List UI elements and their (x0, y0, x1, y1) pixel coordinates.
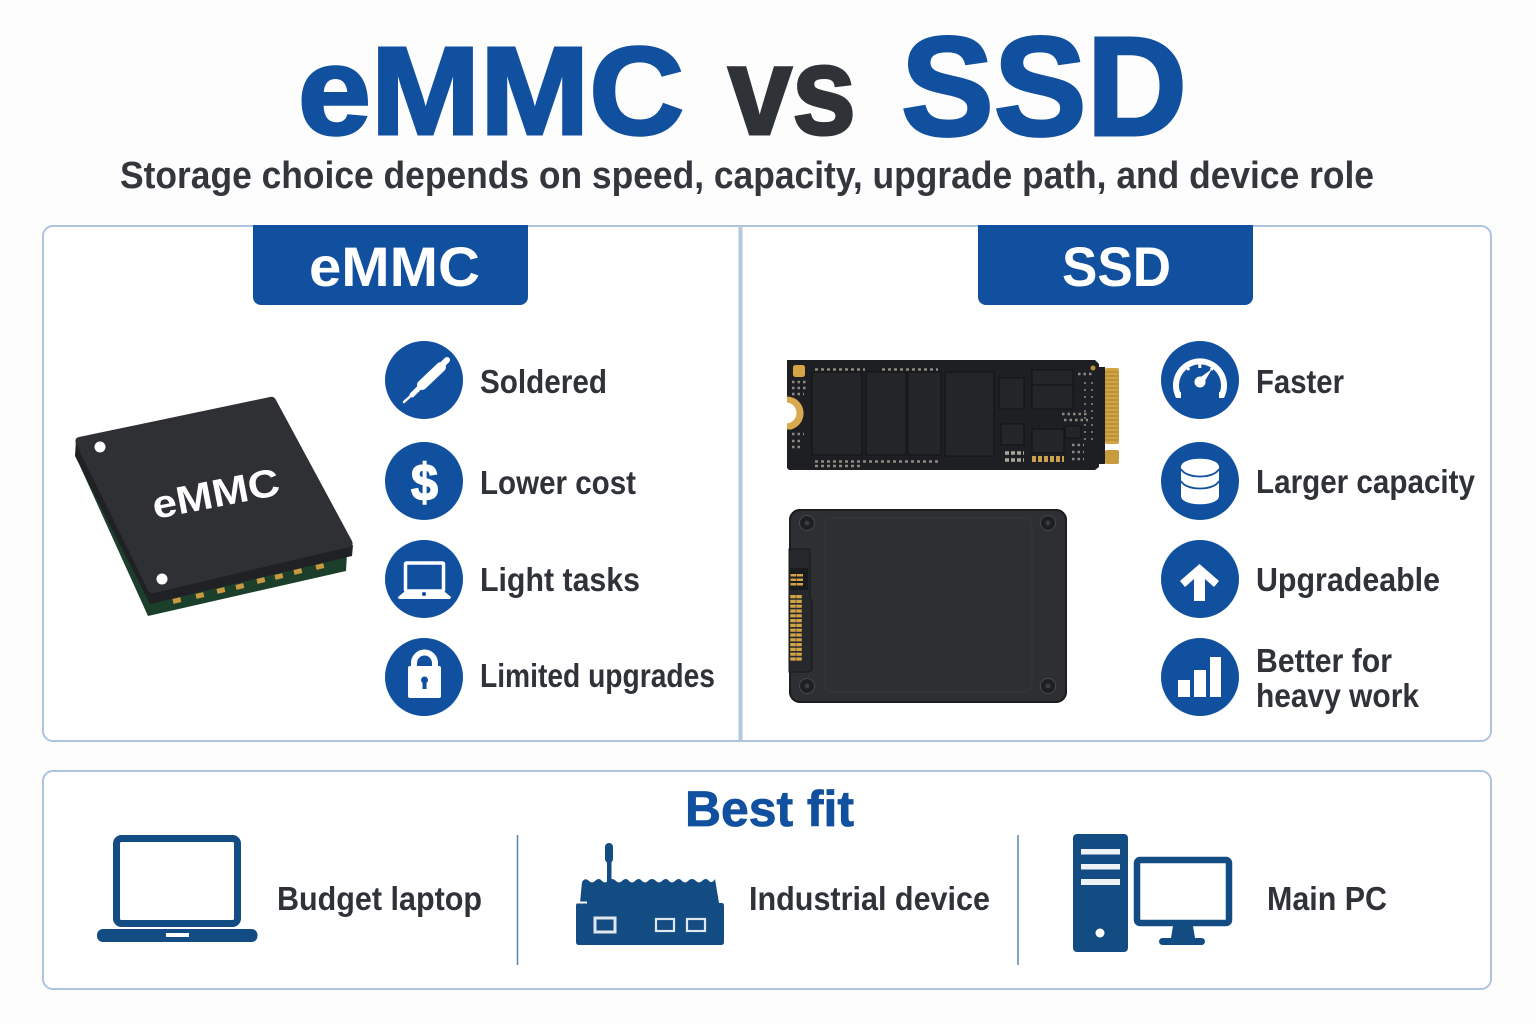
text: Better for heavy work (1256, 642, 1420, 714)
icon: speed gauge (1161, 341, 1239, 419)
icon: bar chart (1161, 638, 1239, 716)
text: Better for heavy work: Better for (1256, 642, 1392, 679)
text: Budget laptop: Budget laptop (277, 880, 482, 917)
icon: database (1161, 442, 1239, 520)
title (298, 7, 1187, 165)
text: Main PC: Main PC (1267, 880, 1387, 917)
icon: dollar: $ (411, 454, 438, 512)
text: Limited upgrades: Limited upgrades (480, 657, 715, 694)
text: Soldered: Soldered (480, 363, 607, 400)
icon: up arrow (1161, 540, 1239, 618)
title: vs (728, 22, 856, 161)
icon: lock (385, 638, 463, 716)
text: Better for heavy work: heavy work (1256, 677, 1420, 714)
text: Light tasks: Light tasks (480, 561, 640, 598)
M.2 SSD illustration (770, 360, 1119, 470)
icon: laptop (385, 540, 463, 618)
text: Larger capacity: Larger capacity (1256, 463, 1476, 500)
panel: best fit (43, 771, 1491, 989)
icon: industrial device (576, 843, 724, 945)
icon: budget laptop (97, 838, 258, 942)
icon: dollar (385, 442, 463, 520)
title: SSD (901, 7, 1187, 165)
text: Upgradeable: Upgradeable (1256, 561, 1440, 598)
subtitle: Storage choice depends on speed, capacity, upgrade path, and device role (120, 155, 1374, 197)
icon: soldering iron (385, 341, 463, 419)
eMMC chip illustration (75, 397, 353, 616)
title: eMMC (298, 22, 684, 161)
eMMC chip illustration: eMMC (149, 461, 283, 528)
heading: Best fit: Best fit (685, 781, 854, 837)
panel: comparison (43, 225, 1491, 741)
2.5 inch SSD illustration (789, 509, 1067, 703)
heading tab: eMMC: eMMC (309, 235, 480, 298)
text: Lower cost: Lower cost (480, 464, 636, 501)
text: Industrial device: Industrial device (749, 880, 990, 917)
heading tab: eMMC (253, 225, 528, 305)
heading tab: SSD (978, 225, 1253, 305)
heading tab: SSD: SSD (1062, 235, 1171, 298)
icon: desktop PC (1073, 834, 1229, 952)
text: Faster: Faster (1256, 363, 1344, 400)
